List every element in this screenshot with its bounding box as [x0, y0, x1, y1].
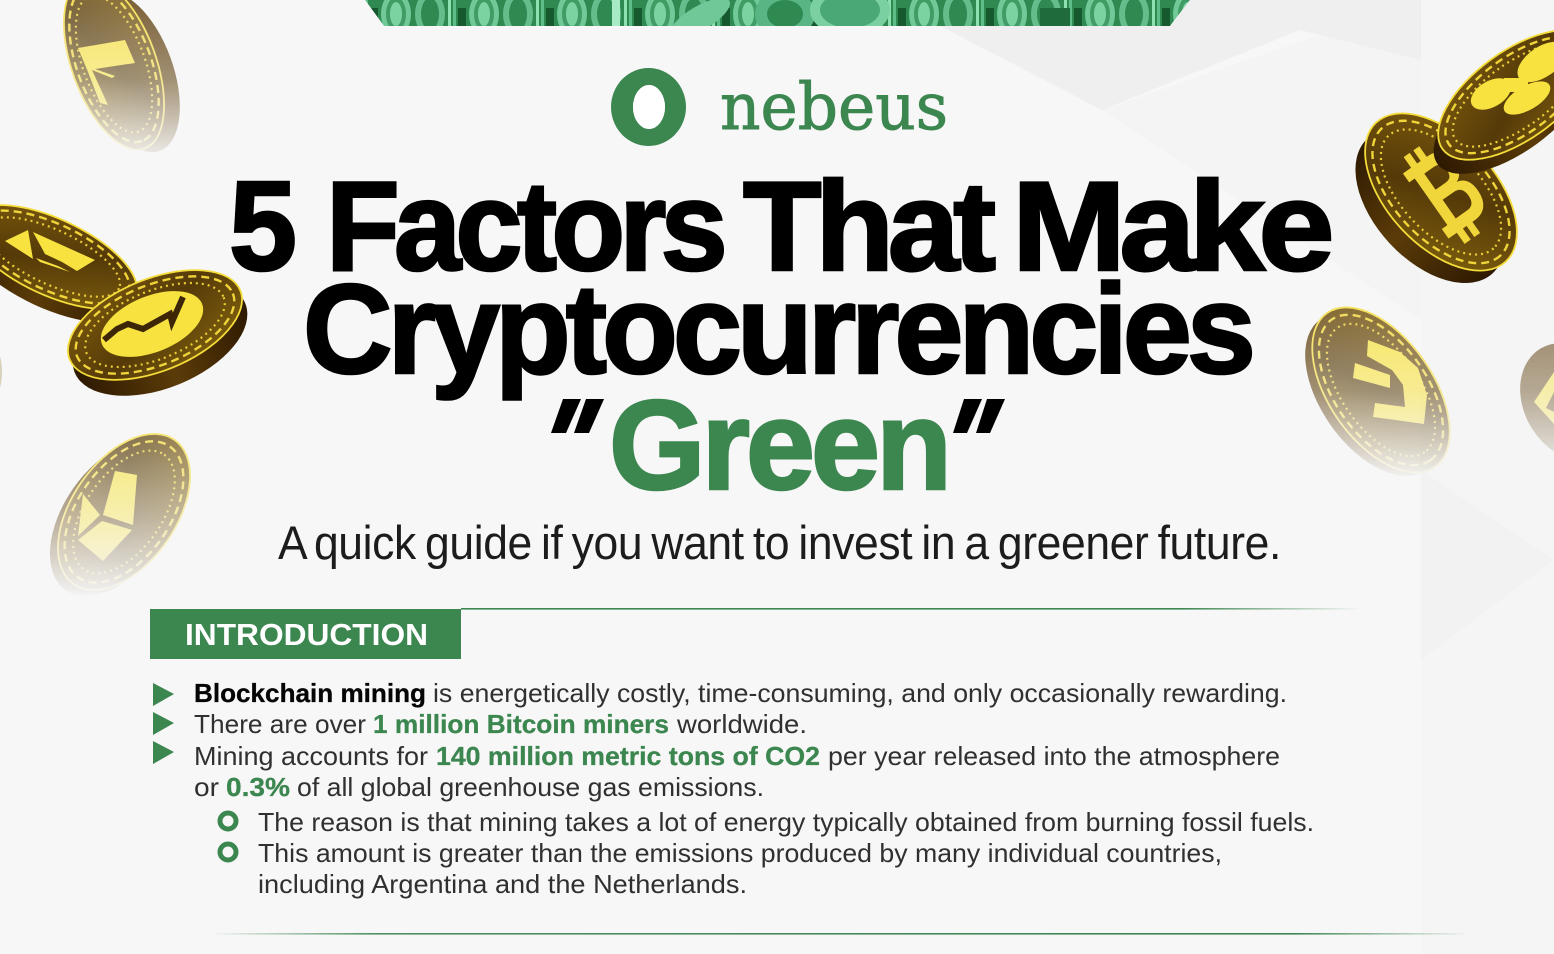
- bullet text 3: or: [194, 772, 219, 802]
- title line 1: Make: [1012, 155, 1331, 297]
- bullet text 3: 0.3%: [226, 772, 290, 802]
- sub-bullet text 1: The reason is that mining takes a lot of energy typically obtained from burning fossil fuels.: [258, 807, 1314, 837]
- coin: bitcoin right: ₿: [1384, 121, 1508, 262]
- bullet text 2: [194, 709, 807, 739]
- sub-bullet text 2: [258, 838, 1222, 899]
- title line 1: [229, 155, 1331, 297]
- logo mark: [611, 68, 686, 146]
- title line 1: Factors: [326, 155, 723, 297]
- icon: ring bullet 1: [220, 813, 236, 829]
- coin: dash right: [1305, 306, 1451, 476]
- coin: ripple right: [1413, 5, 1554, 198]
- closing quote: [953, 399, 982, 433]
- bullet text 3: [194, 741, 1280, 802]
- subtitle: A quick guide if you want to invest in a greener future.: [278, 516, 1281, 569]
- top banner: green circuit coins: [365, 0, 1190, 26]
- bullet text 3: Mining accounts for: [194, 741, 428, 771]
- sub-bullet text 2: including Argentina and the Netherlands.: [258, 869, 747, 899]
- icon: ring bullet 2: [220, 844, 236, 860]
- icon: arrow bullet 3: [153, 741, 174, 764]
- sub-bullet text 2: This amount is greater than the emissions produced by many individual countries,: [258, 838, 1222, 868]
- coin: litecoin top left: [63, 0, 180, 152]
- section header: introduction: [150, 609, 461, 659]
- logo wordmark: nebeus: [720, 70, 948, 145]
- title line 3: Green: Green: [609, 374, 948, 516]
- title line 1: That: [743, 155, 995, 297]
- bullet text 2: worldwide.: [676, 709, 807, 739]
- bullet text 2: 1 million Bitcoin miners: [373, 709, 669, 739]
- bullet text 3: of all global greenhouse gas emissions.: [297, 772, 764, 802]
- icon: arrow bullet 2: [153, 712, 174, 735]
- coin: kyber lower left: [50, 433, 191, 593]
- bullet text 2: There are over: [194, 709, 366, 739]
- coin: far right: [1520, 344, 1554, 452]
- icon: arrow bullet 1: [153, 683, 174, 706]
- top rule: [461, 608, 1361, 610]
- bullet list: [153, 678, 1314, 899]
- second stroke of opening quote: [574, 399, 604, 433]
- coin: bitcoin right: [1327, 86, 1545, 311]
- section header: introduction: INTRODUCTION: [185, 617, 428, 652]
- coin: partial left edge: [0, 348, 2, 396]
- logo: nebeus: [611, 68, 948, 146]
- bullet text 3: per year released into the atmosphere: [828, 741, 1280, 771]
- coin: ethereum classic left: [0, 184, 151, 344]
- second stroke of closing quote: [976, 399, 1005, 433]
- opening quote: [551, 399, 581, 433]
- bottom rule: [210, 933, 1470, 935]
- bullet text 1: Blockchain mining: [194, 678, 426, 708]
- bullet text 1: is energetically costly, time-consuming, and only occasionally rewarding.: [433, 678, 1287, 708]
- title: [229, 155, 1331, 516]
- bullet text 3: 140 million metric tons of CO2: [436, 741, 820, 771]
- coin: monero left: [52, 248, 264, 419]
- title line 2: Cryptocurrencies: [303, 258, 1251, 400]
- title line 1: 5: [229, 155, 297, 297]
